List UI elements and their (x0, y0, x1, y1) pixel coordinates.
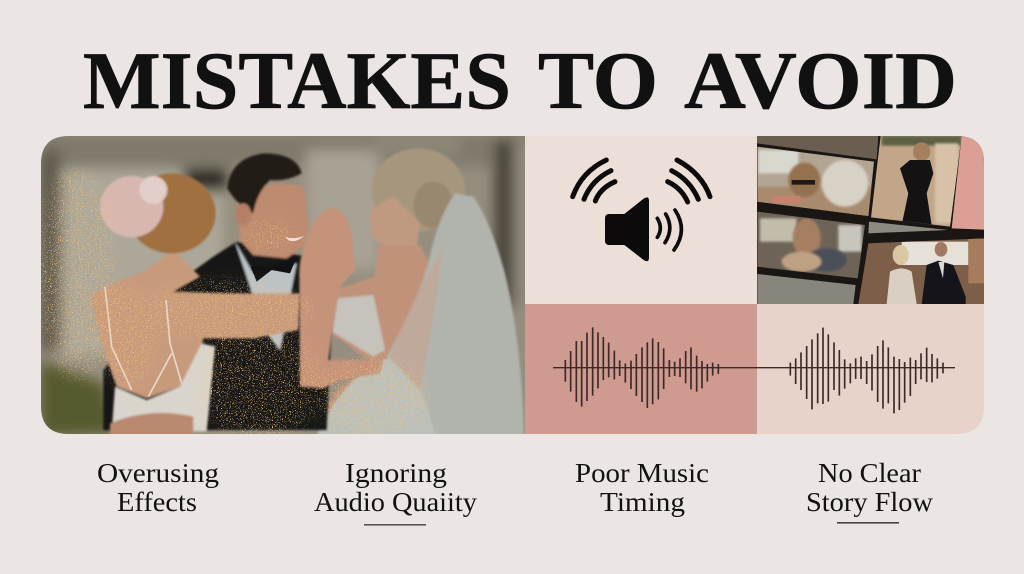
frame: top sliver (868, 222, 948, 233)
title: MISTAKES (83, 35, 511, 126)
label: poor music timing: Poor Music (575, 457, 709, 488)
label: ignoring audio quality (314, 457, 477, 526)
label: ignoring audio quality: Ignoring (345, 457, 447, 488)
label: no clear story flow: Story Flow (806, 486, 933, 517)
label: poor music timing: Timing (600, 486, 685, 517)
bride forearm and hands (299, 207, 383, 388)
icon: speaker with sound waves (573, 160, 710, 261)
label: overusing effects (97, 457, 219, 517)
frame strip top (757, 136, 878, 159)
title (83, 35, 957, 126)
frame: couple (857, 237, 985, 305)
left bride (90, 173, 300, 435)
frame: flowers (755, 210, 867, 280)
panel: story flow tile (757, 304, 984, 434)
label: poor music timing (575, 457, 709, 517)
panel: wedding photo with glitter effects (38, 133, 530, 440)
label: no clear story flow (806, 457, 933, 524)
label: no clear story flow: No Clear (818, 457, 921, 488)
right bride (317, 148, 524, 437)
groom jacket (103, 153, 340, 430)
photo background (40, 133, 530, 437)
chart: audio waveform (553, 327, 955, 413)
panel: video collage tile (755, 136, 992, 305)
label: overusing effects: Effects (117, 486, 197, 517)
glitter mask (38, 167, 430, 440)
frame: woman in black (868, 136, 965, 229)
title: TO (538, 35, 658, 126)
title: AVOID (684, 35, 957, 126)
pink corner (952, 136, 984, 230)
frame: bottom strip (757, 274, 856, 304)
frame: man with glasses (755, 145, 877, 217)
panel: poor music timing tile (525, 304, 757, 434)
label: ignoring audio quality: Audio Quaiity (314, 486, 477, 517)
label: overusing effects: Overusing (97, 457, 219, 488)
panel: audio quality tile (525, 136, 757, 304)
